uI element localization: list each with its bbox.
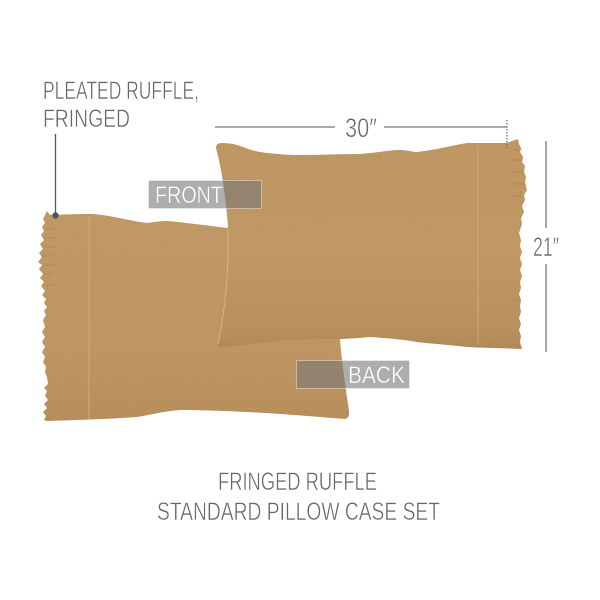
front pillow <box>216 139 527 349</box>
title: FRINGED RUFFLE <box>218 468 377 496</box>
front pillow left edge highlight <box>218 230 228 344</box>
label: back <box>296 360 410 389</box>
label: pleated ruffle, fringed: FRINGED <box>43 105 130 133</box>
width dimension: 30 inches: 30″ <box>345 113 377 143</box>
height dimension: 21 inches: 21″ <box>533 232 559 262</box>
label: pleated ruffle, fringed: PLEATED RUFFLE, <box>43 77 199 105</box>
title: STANDARD PILLOW CASE SET <box>157 498 440 526</box>
leader line with dot <box>52 134 59 219</box>
title <box>157 468 440 526</box>
front pillow fold line <box>477 146 479 345</box>
back pillow fringe slits <box>42 229 56 285</box>
label: front <box>148 180 262 209</box>
back pillow fold line <box>88 216 90 419</box>
label: back: BACK <box>348 362 405 389</box>
front pillow fringe slits <box>511 150 525 300</box>
label: pleated ruffle, fringed <box>43 77 199 133</box>
back pillow <box>38 211 349 421</box>
label: front: FRONT <box>155 182 223 209</box>
